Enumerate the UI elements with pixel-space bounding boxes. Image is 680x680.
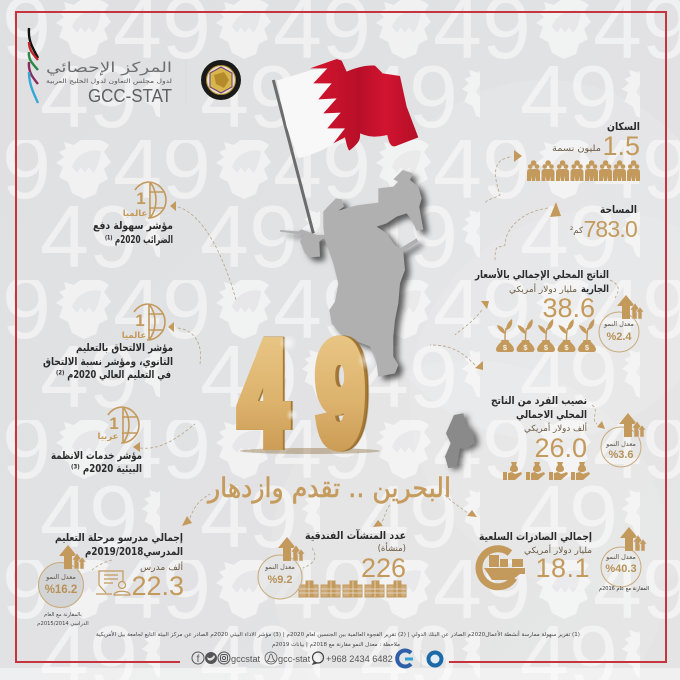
panel: population: [527, 121, 640, 181]
logo GCC-STAT wordmark: GCC-STAT: [88, 86, 172, 106]
icon: buildings: [299, 581, 406, 597]
growth badge: [258, 537, 305, 599]
value: 22.3: [131, 571, 184, 601]
growth badge: %9.2: [267, 574, 293, 586]
panel: merchandise exports: [479, 527, 649, 592]
panel: education enrolment rank: [43, 304, 173, 381]
panel: GDP: [474, 268, 644, 352]
panel: environmental services rank: [51, 407, 142, 475]
panel: GDP per capita: [491, 395, 646, 480]
icon: money plants: [496, 319, 596, 352]
icon: cargo ship: [479, 549, 525, 587]
value: 226: [361, 553, 406, 583]
icon: twitter: [205, 652, 217, 664]
heading: نصيب الفرد من الناتج: [491, 395, 587, 407]
heading: المساحة: [600, 204, 637, 216]
note line two: الدراسي 2015/2014م: [37, 621, 89, 627]
flag of Bahrain: [273, 59, 418, 233]
logo: GCC-STAT: [29, 28, 186, 106]
heading: السكان: [607, 121, 640, 133]
text line two: البيئية 2020م ⁽³⁾: [71, 463, 142, 475]
panel: teachers: [37, 532, 184, 627]
heading: عدد المنشآت الفندقية: [305, 529, 406, 542]
heading: إجمالي الصادرات السلعية: [479, 531, 592, 543]
map of Bahrain: [280, 170, 423, 377]
icon: globe rank: عربيا: [98, 432, 118, 442]
icon: globe rank: [98, 407, 139, 443]
map: Hawar islands: [445, 413, 475, 468]
logo: G mark: [397, 650, 413, 666]
flag pole: [273, 80, 313, 233]
icon: whatsapp: [312, 652, 324, 664]
icon: globe rank: [123, 182, 166, 219]
unit: ألف دولار أمريكي: [524, 422, 587, 434]
digit 4: 4: [239, 314, 287, 475]
growth badge: معدل النمو: [605, 553, 636, 561]
unit: مليار دولار أمريكي: [524, 544, 592, 556]
icon: facebook: [192, 652, 204, 665]
growth badge: %2.4: [606, 331, 632, 343]
text line two: الثانوي، ومؤشر نسبة الالتحاق: [43, 356, 173, 368]
icon: globe rank: 1: [109, 414, 119, 433]
dashed connector arrows: [92, 150, 618, 570]
value: 1.5: [602, 131, 640, 161]
growth badge: [38, 545, 86, 608]
big golden number 49: [239, 314, 380, 475]
growth badge: معدل النمو: [603, 320, 634, 328]
logo: TUV certification: [426, 650, 444, 668]
heading line two: المحلي الاجمالي: [516, 409, 587, 421]
handle: gccstat: [231, 654, 261, 664]
digit 9: 9: [316, 314, 364, 475]
growth badge: [601, 413, 646, 467]
icon: globe rank: 1: [135, 311, 145, 330]
panel: hotels: [258, 529, 406, 599]
flag red part: [310, 59, 418, 151]
unit: ألف مدرس: [140, 561, 183, 573]
phone number: +968 2434 6482: [326, 654, 393, 664]
growth badge: %40.3: [605, 563, 637, 575]
value: 783.0: [583, 216, 637, 242]
heading: إجمالي مدرسو مرحلة التعليم: [55, 532, 183, 544]
icon: globe rank: عالميا: [123, 209, 147, 219]
icon: globe rank: [122, 304, 165, 341]
footnotes: (1) تقرير سهولة ممارسة أنشطة الأعمال2020م الصادر عن البنك الدولي | (2) تقرير الفجوة العالمية بين الجنسين لعام 2020م | (3) مؤشر الاداء البيئي 2020م الصادر عن مركز البيئة التابع لجامعة بيل الأمريكية: [96, 630, 580, 638]
growth badge: %3.6: [608, 449, 634, 461]
flag white part: [277, 68, 345, 158]
footer contact bar: [192, 650, 444, 668]
note: المقارنة مع عام 2016م: [599, 586, 649, 592]
value: 26.0: [534, 433, 587, 463]
icon: globe rank: عالميا: [122, 331, 146, 341]
icon: globe rank: 1: [136, 189, 146, 208]
note line: ملاحظة : معدل النمو مقارنة مع 2018م | بيانات 2019م: [272, 642, 400, 648]
footnotes: [96, 630, 580, 648]
logo arabic name: المركز الإحصائي: [46, 60, 172, 76]
icon: teacher: [96, 571, 130, 595]
icon: instagram: [218, 652, 230, 664]
text line two: الضرائب 2020م ⁽¹⁾: [105, 234, 173, 246]
panel: area: [570, 204, 637, 242]
text line three: في التعليم العالي 2020م ⁽²⁾: [56, 369, 171, 381]
unit: كم²: [570, 226, 584, 236]
text: مؤشر خدمات الانظمة: [51, 450, 142, 462]
growth badge: [599, 295, 644, 352]
icon: facebook: f: [197, 654, 200, 665]
logo arabic subtitle: لدول مجلس التعاون لدول الخليج العربية: [46, 79, 172, 85]
unit: مليون نسمة: [552, 144, 601, 154]
value: 18.1: [535, 553, 590, 583]
growth badge: %16.2: [45, 584, 77, 596]
main island: [323, 170, 423, 377]
icon: people row: [527, 160, 640, 181]
heading: الناتج المحلي الإجمالي بالأسعار: [474, 268, 609, 281]
note: بالمقارنة مع العام: [44, 612, 82, 618]
growth badge: [601, 527, 647, 587]
growth badge: معدل النمو: [45, 573, 76, 581]
unit: مليار دولار أمريكي: [509, 283, 577, 295]
value: 38.6: [542, 293, 595, 323]
logo ribbons: [29, 28, 38, 103]
handle: gcc-stat: [278, 654, 311, 664]
text: مؤشر الالتحاق بالتعليم: [76, 342, 173, 354]
Sitra island west: [280, 229, 327, 257]
growth badge: معدل النمو: [264, 563, 295, 571]
icon: snapchat: [265, 652, 277, 664]
logo: GCC seal: [201, 60, 241, 100]
growth badge: معدل النمو: [605, 440, 636, 448]
title: Bahrain progress and prosperity: البحرين .. تقدم وازدهار: [206, 473, 451, 504]
heading line two: الجارية: [581, 284, 609, 295]
shadow under number: [240, 448, 380, 454]
panel: tax ease rank: [93, 182, 173, 246]
text: مؤشر سهولة دفع: [93, 220, 173, 232]
heading line two: المدرسي2019/2018م: [85, 546, 183, 558]
icon: hands with bags: [503, 462, 590, 480]
unit: (منشأة): [378, 542, 406, 554]
